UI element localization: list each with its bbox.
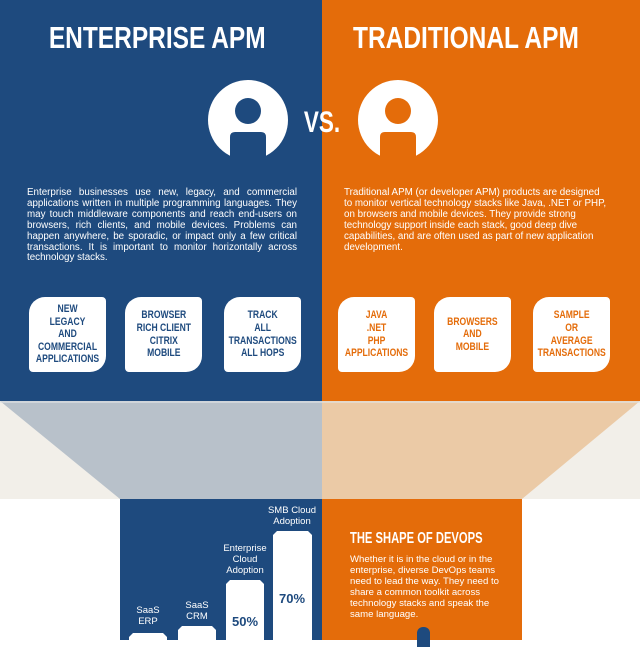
- bar chart: 70%: [279, 591, 305, 606]
- title: enterprise apm: ENTERPRISE APM: [49, 20, 265, 55]
- text: enterprise description: Enterprise businesses use new, legacy, and commercial applications written in multiple programming languages. They may touch middleware components and reach end-users on browsers, rich clients, and mobile devices. Problems can happen anywhere, be sporadic, or impact only a few critical transactions. It is important to monitor horizontally across technology stacks.: [27, 187, 297, 263]
- text: CRM: [186, 611, 208, 622]
- box: browsers and mobile: AND: [463, 328, 482, 340]
- box: java: APPLICATIONS: [345, 347, 408, 359]
- box: sample: AVERAGE: [551, 334, 592, 346]
- text: devops: Whether it is in the cloud or in the enterprise, diverse DevOps teams need to lead the way. They need to share a common toolkit across technology stacks and speak the same language.: [350, 554, 499, 620]
- box: browser: RICH CLIENT: [136, 322, 191, 334]
- bar labels: SaaS: [136, 605, 160, 616]
- box: new legacy: LEGACY: [50, 316, 85, 328]
- box: browser: BROWSER: [141, 309, 186, 321]
- heading: shape of devops: THE SHAPE OF DEVOPS: [350, 530, 483, 547]
- box: track: ALL HOPS: [241, 347, 284, 359]
- box: browsers and mobile: [434, 297, 511, 372]
- icons: users vs: [208, 80, 438, 156]
- box: new legacy: COMMERCIAL: [38, 341, 97, 353]
- text: SMB Cloud: [268, 505, 316, 516]
- box: browser: CITRIX: [149, 334, 178, 346]
- box: browser: MOBILE: [147, 347, 180, 359]
- background: top halves: [0, 0, 322, 401]
- box: java: .NET: [367, 322, 386, 334]
- box: track: TRACK: [247, 309, 278, 321]
- box: java: PHP: [368, 334, 385, 346]
- box: new legacy: NEW: [57, 303, 78, 315]
- text: Cloud: [233, 554, 257, 565]
- box: browsers and mobile: BROWSERS: [447, 316, 498, 328]
- bar chart: 50%: [232, 614, 258, 629]
- bar labels: ERP: [138, 616, 158, 627]
- vs text: VS.: [304, 105, 340, 139]
- box: track: [224, 297, 301, 372]
- box: sample: TRANSACTIONS: [537, 347, 606, 359]
- bar labels: [136, 605, 160, 627]
- bar chart: [129, 531, 312, 640]
- box: java: JAVA: [366, 309, 387, 321]
- icon: enterprise user: [208, 80, 288, 160]
- box: sample: OR: [565, 322, 578, 334]
- box: browser: [125, 297, 202, 372]
- box: track: ALL: [254, 322, 271, 334]
- text: SaaS: [185, 600, 209, 611]
- box: new legacy: APPLICATIONS: [36, 353, 99, 365]
- title: traditional apm: TRADITIONAL APM: [353, 20, 579, 55]
- icon: devops person: [417, 627, 430, 647]
- box: sample: [533, 297, 610, 372]
- box: sample: SAMPLE: [554, 309, 589, 321]
- text: Adoption: [273, 516, 311, 527]
- box: java: [338, 297, 415, 372]
- box: new legacy: [29, 297, 106, 372]
- text: Adoption: [226, 565, 264, 576]
- box: browsers and mobile: MOBILE: [456, 341, 489, 353]
- box: track: TRANSACTIONS: [228, 334, 297, 346]
- text: traditional description: Traditional APM (or developer APM) products are designed to monitor vertical technology stacks like Java, .NET or PHP, on browsers and mobile devices. They provide strong technology support inside each stack, good deep dive capabilities, and are often used as part of new application development.: [344, 187, 606, 253]
- text: Enterprise: [223, 543, 267, 554]
- icon: traditional user: [358, 80, 438, 160]
- funnel: [0, 401, 640, 640]
- box: new legacy: AND: [58, 328, 77, 340]
